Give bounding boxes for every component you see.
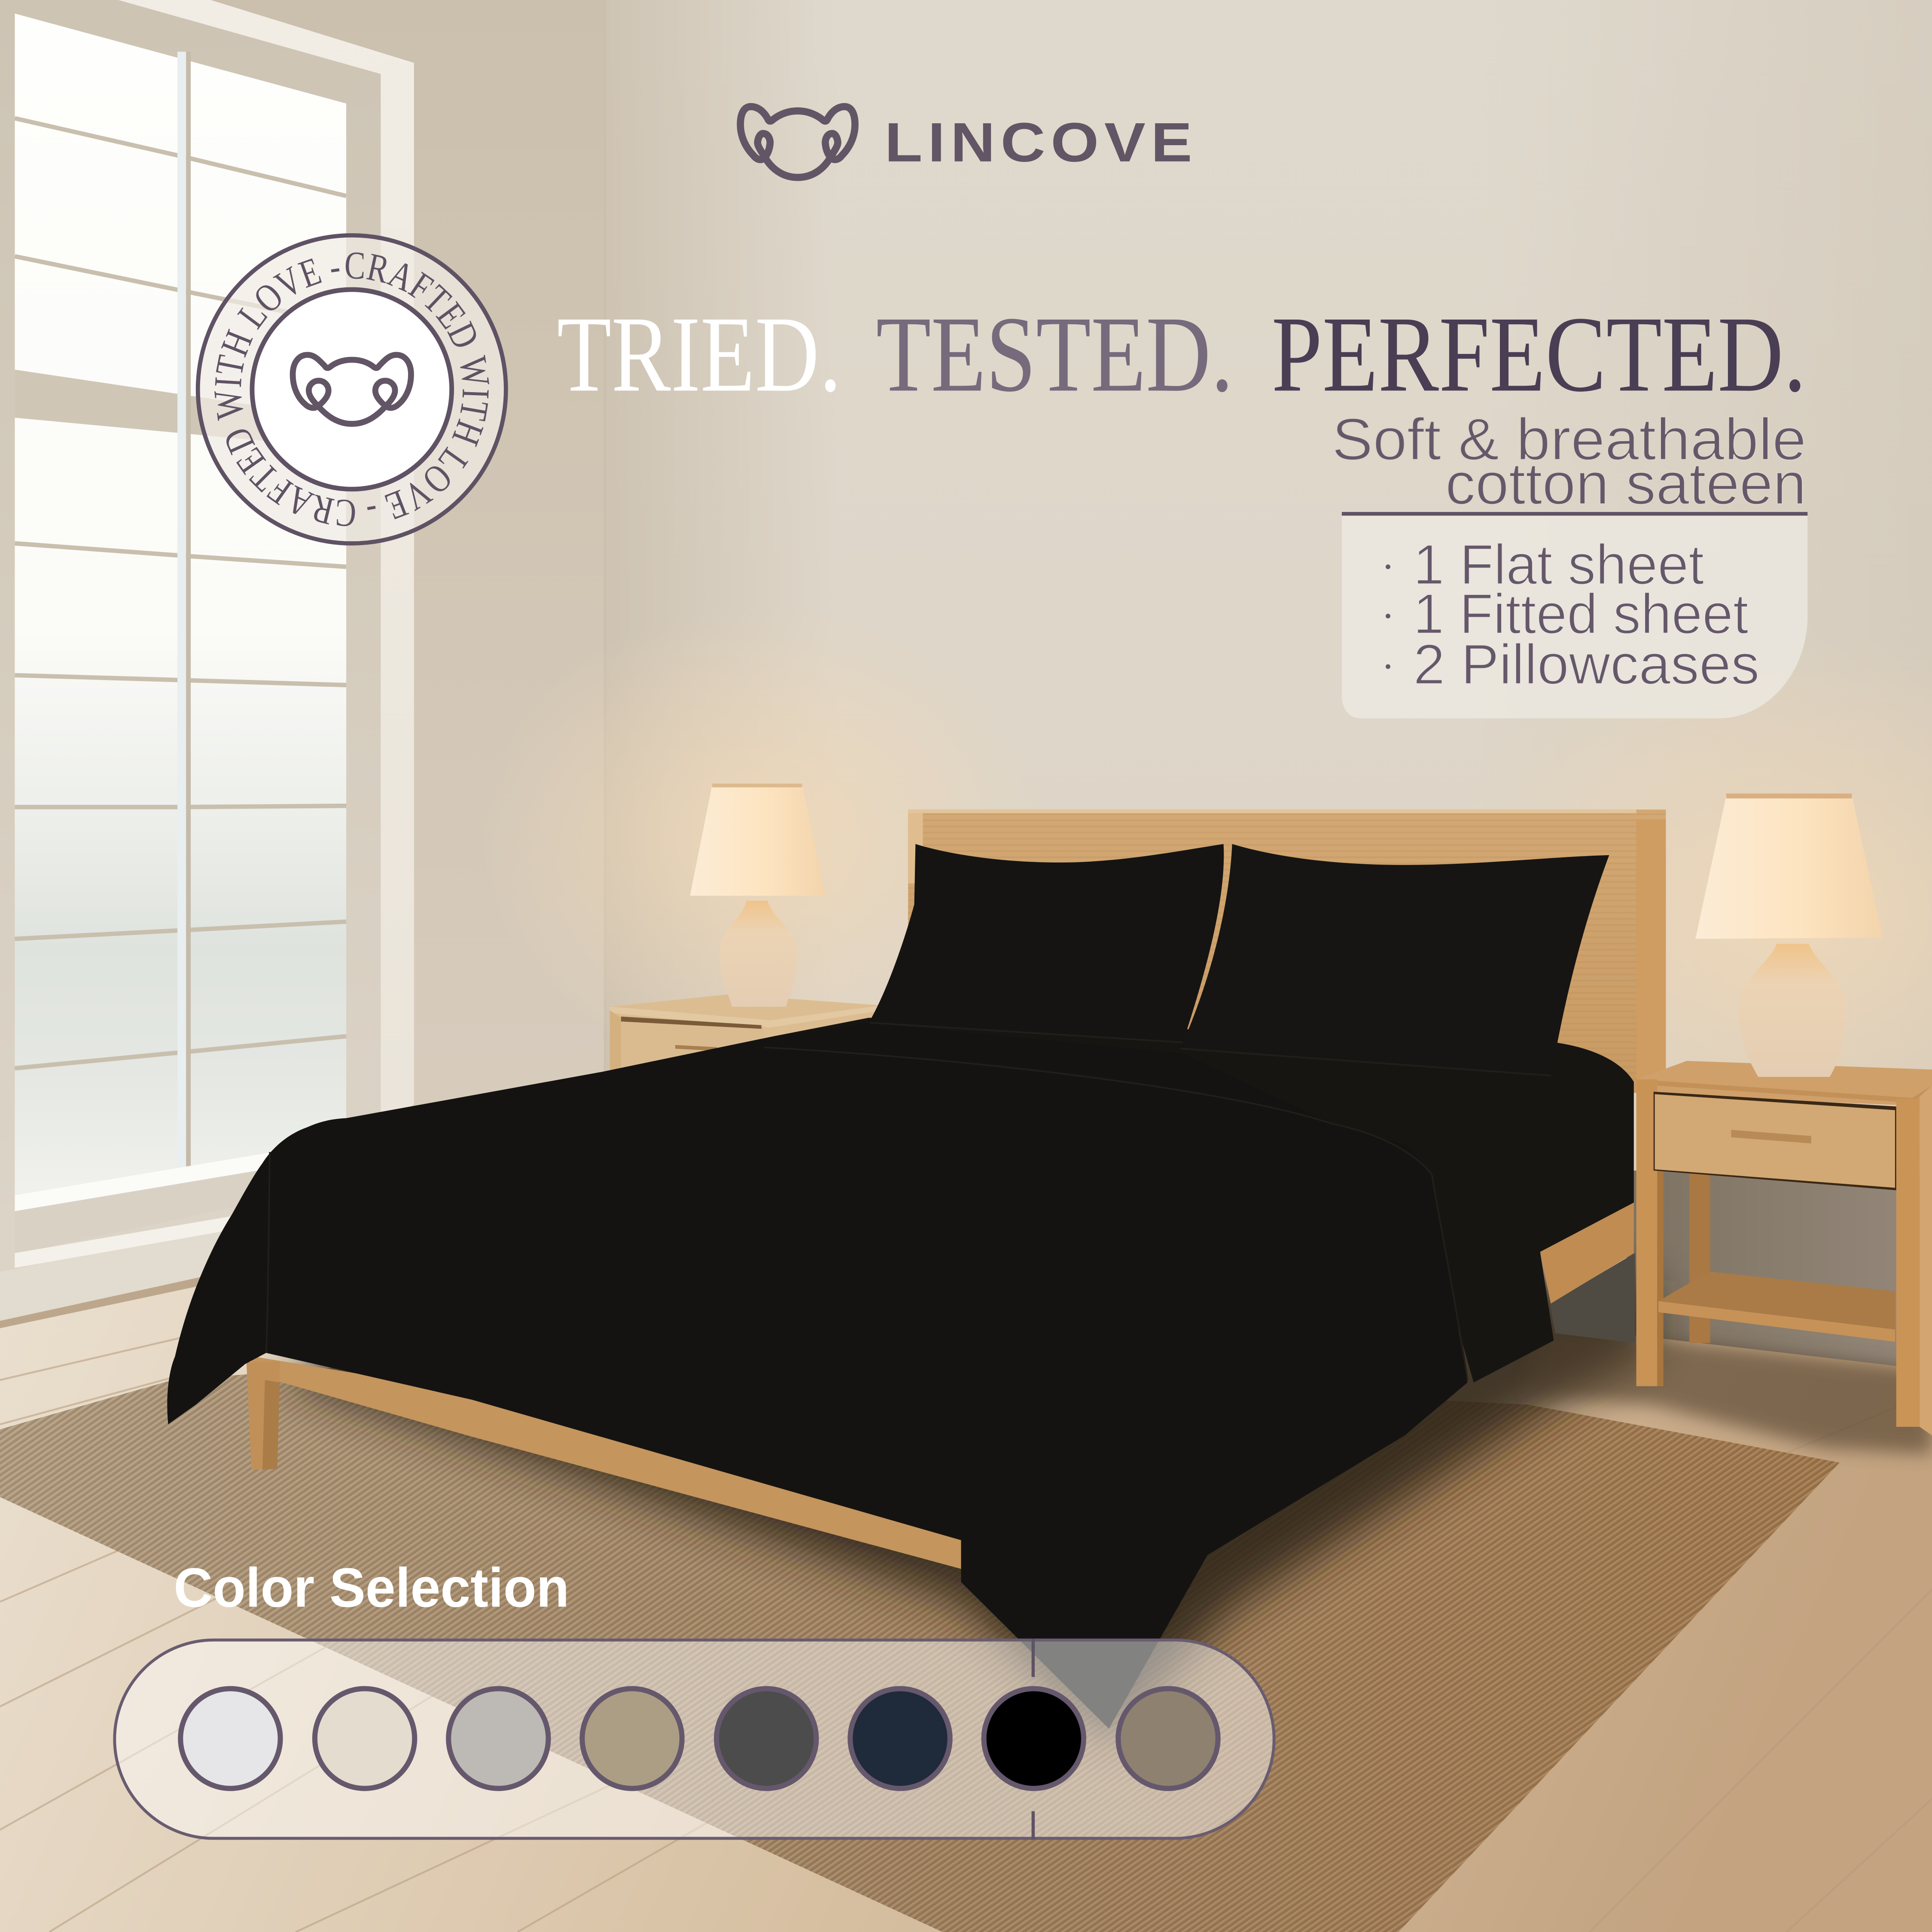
contents list: 1 Flat sheet xyxy=(1413,533,1704,596)
icon: badge elephant xyxy=(293,355,411,424)
window xyxy=(0,0,414,1328)
fitted sheet xyxy=(774,1018,1634,1383)
logo xyxy=(740,107,1198,177)
subtitle: Soft & breathable xyxy=(1332,406,1806,472)
pillow left xyxy=(868,844,1224,1042)
rug xyxy=(0,1355,1840,1932)
swatches xyxy=(180,1688,1218,1789)
right nightstand xyxy=(1636,1061,1932,1435)
floor xyxy=(0,1281,1932,1932)
subtitle xyxy=(1332,406,1806,517)
icon: elephant logo xyxy=(740,107,855,177)
headboard xyxy=(908,810,1666,1093)
flat sheet xyxy=(167,1023,1468,1729)
color selection title: Color Selection xyxy=(174,1557,569,1619)
contents list: 2 Pillowcases xyxy=(1413,633,1759,696)
bed shadow xyxy=(283,1232,1651,1743)
headline word: tested: TESTED. xyxy=(876,294,1233,414)
list bullets xyxy=(1386,564,1390,669)
headline word: tried: TRIED. xyxy=(557,294,841,414)
right lamp xyxy=(1695,793,1883,1077)
pillow right xyxy=(1180,844,1609,1076)
shadow: wall under bed frame xyxy=(1550,1253,1635,1343)
logo wordmark: LINCOVE xyxy=(885,112,1198,174)
sheet fold lines xyxy=(266,1023,1551,1380)
left lamp xyxy=(690,783,826,1007)
badge circular text: CRAFTED WITH LOVE - CRAFTED WITH LOVE - xyxy=(195,233,509,545)
glass panes xyxy=(15,14,346,1195)
contents list xyxy=(1413,533,1759,696)
left nightstand xyxy=(610,994,882,1074)
bed frame rail xyxy=(247,1203,1634,1572)
contents panel xyxy=(1342,512,1807,718)
shadow: floor beside right nightstand xyxy=(1528,1325,1932,1454)
badge xyxy=(195,233,509,545)
headline xyxy=(557,294,1806,414)
selected tick marks xyxy=(1033,1639,1034,1840)
color selection pill xyxy=(115,1639,1274,1840)
contents list: 1 Fitted sheet xyxy=(1413,582,1749,645)
subtitle: cotton sateen xyxy=(1445,451,1806,517)
headline word: perfected: PERFECTED. xyxy=(1271,294,1806,414)
